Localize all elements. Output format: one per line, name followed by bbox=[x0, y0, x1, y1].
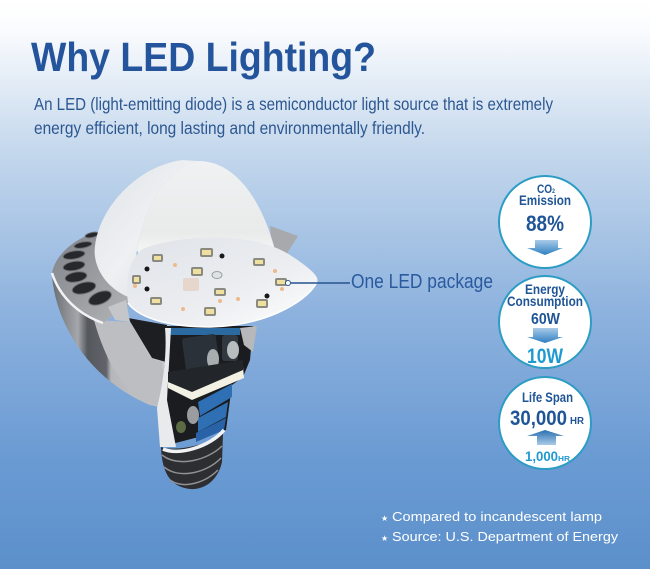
callout line bbox=[291, 282, 350, 284]
electronics cavity bbox=[160, 326, 253, 447]
badge: energy consumption: 10W bbox=[527, 345, 563, 368]
footnotes: ★ bbox=[381, 534, 388, 543]
heat sink body bbox=[52, 276, 170, 407]
arrow down bbox=[527, 240, 563, 255]
badge: CO2 emission: 88% bbox=[526, 211, 564, 236]
badge: life span: HR bbox=[570, 416, 585, 427]
white housing strip bbox=[157, 328, 176, 447]
small white component bbox=[212, 272, 222, 278]
badge: life span: 30,000 bbox=[510, 407, 567, 430]
dome outer shell bbox=[95, 160, 197, 298]
arrow up bbox=[527, 430, 564, 445]
dome inner surface bbox=[137, 161, 275, 272]
badge: CO2 emission: Emission bbox=[519, 192, 571, 208]
footnotes: ★ bbox=[381, 514, 388, 523]
small parts bbox=[187, 406, 199, 424]
intro text bbox=[34, 94, 553, 138]
callout label: One LED package bbox=[351, 271, 493, 293]
screw base bbox=[161, 433, 223, 489]
intro text: energy efficient, long lasting and environmentally friendly. bbox=[34, 118, 425, 138]
LED chips bbox=[133, 249, 286, 315]
badge: energy consumption: Energy bbox=[525, 282, 565, 297]
title: Why LED Lighting? bbox=[31, 34, 376, 80]
footnotes bbox=[381, 509, 619, 544]
arrow down bbox=[527, 328, 563, 343]
badge: CO2 emission: CO2 bbox=[537, 182, 556, 196]
badge: energy consumption bbox=[499, 276, 591, 368]
callout marker bbox=[286, 280, 290, 286]
badge: energy consumption: Consumption bbox=[507, 293, 583, 309]
footnotes: Source: U.S. Department of Energy bbox=[392, 529, 619, 544]
LED bulb cutaway illustration bbox=[52, 160, 318, 489]
screw threads bbox=[162, 446, 222, 485]
base rim bbox=[163, 430, 224, 451]
vent slots bbox=[62, 231, 113, 308]
circuit board bbox=[168, 367, 244, 400]
badge: life span: 1,000 bbox=[525, 449, 558, 464]
badge: life span: HR bbox=[558, 454, 571, 463]
right bracket bbox=[240, 326, 257, 352]
footnotes: Compared to incandescent lamp bbox=[392, 509, 602, 524]
badge: life span: Life Span bbox=[522, 389, 573, 405]
badge: life span bbox=[499, 377, 591, 469]
lower collar bbox=[94, 320, 163, 407]
disc rim bbox=[128, 282, 317, 327]
intro text: An LED (light-emitting diode) is a semiconductor light source that is extremely bbox=[34, 94, 553, 114]
LED package callout bbox=[286, 271, 493, 293]
silver vented ring bbox=[52, 232, 135, 323]
badge: CO2 emission bbox=[499, 176, 591, 268]
capacitors bbox=[182, 334, 239, 374]
badge: energy consumption: 60W bbox=[531, 311, 560, 328]
ring rim bbox=[52, 273, 103, 323]
orange dots bbox=[133, 263, 284, 311]
right clip bbox=[270, 226, 298, 258]
upper dark cavity bbox=[128, 318, 167, 362]
blue strip behind capacitors bbox=[170, 328, 240, 335]
LED disc bbox=[127, 238, 318, 327]
bracket bbox=[108, 300, 130, 322]
blue components bbox=[196, 384, 232, 442]
center chip bbox=[183, 278, 199, 291]
black dots bbox=[144, 254, 270, 298]
